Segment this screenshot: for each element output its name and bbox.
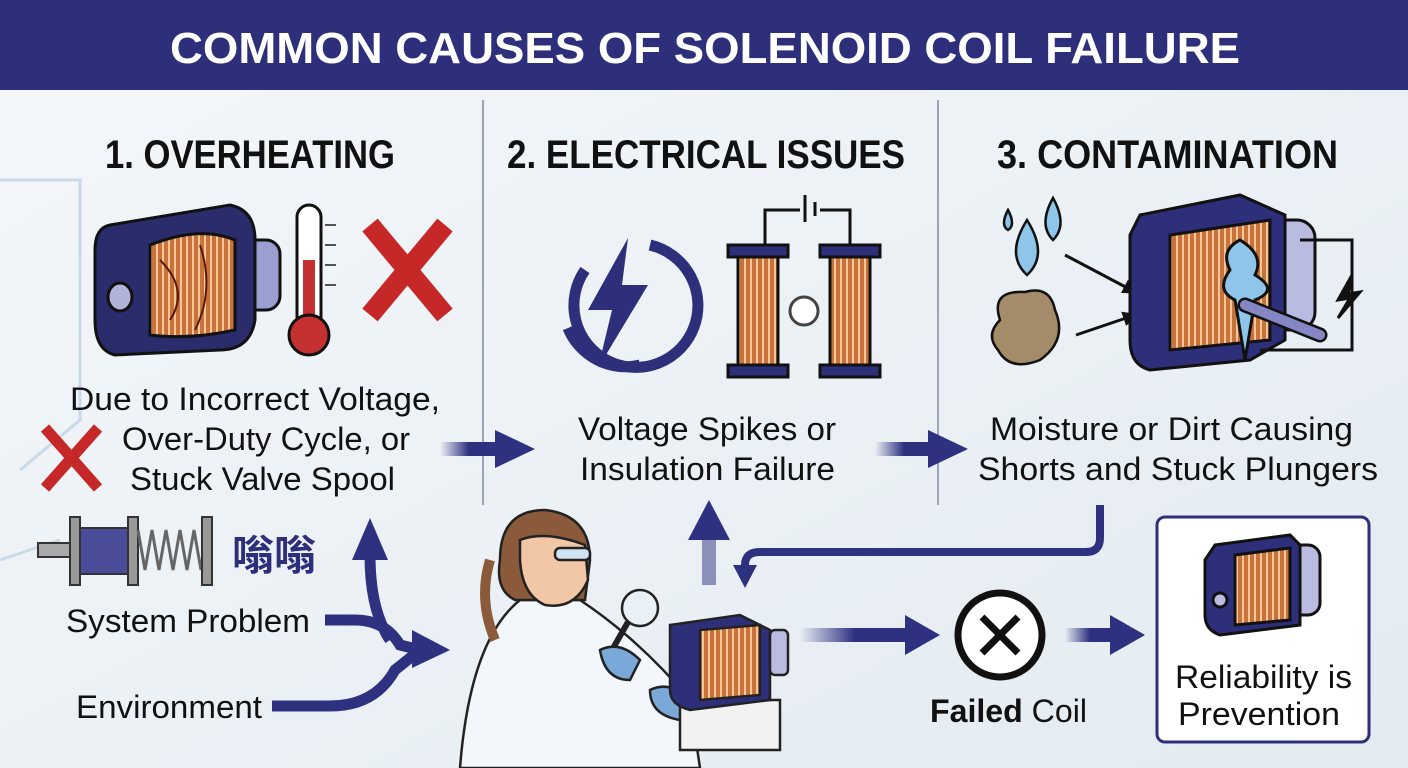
- heading: contamination: 3. CONTAMINATION: [997, 133, 1338, 177]
- text: contamination: [978, 411, 1378, 487]
- text: overheating causes: Over-Duty Cycle, or: [122, 421, 410, 457]
- panel: reliability is prevention: Reliability is: [1175, 659, 1352, 695]
- heading: overheating: 1. OVERHEATING: [105, 133, 395, 177]
- title banner: [0, 0, 1408, 90]
- arrows: converging: [272, 555, 420, 706]
- text: buzz: 嗡嗡: [232, 532, 316, 579]
- scientist illustration: [460, 510, 788, 768]
- arrow: 2 to 3: [875, 430, 968, 468]
- title banner: COMMON CAUSES OF SOLENOID COIL FAILURE: [170, 24, 1240, 73]
- text: overheating causes: [70, 381, 440, 497]
- heading: electrical: 2. ELECTRICAL ISSUES: [507, 133, 905, 177]
- arrow: contamination loop back: [745, 505, 1100, 570]
- icon: small red X: [45, 428, 98, 488]
- icon: lightning circle: [568, 238, 698, 368]
- icon: burnt coil: [95, 205, 280, 355]
- icon: solenoid spring: [38, 517, 212, 585]
- text: overheating causes: Stuck Valve Spool: [130, 461, 395, 497]
- icon: failed coil circle: [958, 593, 1042, 677]
- text: contamination: Moisture or Dirt Causing: [990, 411, 1353, 447]
- text: environment: Environment: [76, 689, 262, 725]
- arrow: scientist to electrical: [688, 500, 730, 585]
- text: failed coil: Failed Coil: [930, 693, 1087, 729]
- icon: contaminated solenoid: [1130, 195, 1360, 370]
- text: overheating causes: Due to Incorrect Voltage,: [70, 381, 440, 417]
- text: electrical: Insulation Failure: [580, 451, 835, 487]
- panel: reliability is prevention: Prevention: [1178, 696, 1340, 732]
- text: electrical: [578, 411, 836, 487]
- icon: thermometer: [289, 205, 336, 355]
- arrow: failed to reliability: [1065, 615, 1145, 655]
- arrow: scientist to failed coil: [800, 615, 940, 655]
- icon: shorted coils: [728, 195, 880, 377]
- text: system problem: System Problem: [66, 603, 310, 639]
- arrow: 1 to 2: [440, 430, 535, 468]
- text: contamination: Shorts and Stuck Plungers: [978, 451, 1378, 487]
- icon: red X: [370, 225, 445, 315]
- panel: reliability is prevention: [1157, 517, 1369, 742]
- icon: water drops and dirt: [992, 198, 1060, 364]
- text: electrical: Voltage Spikes or: [578, 411, 836, 447]
